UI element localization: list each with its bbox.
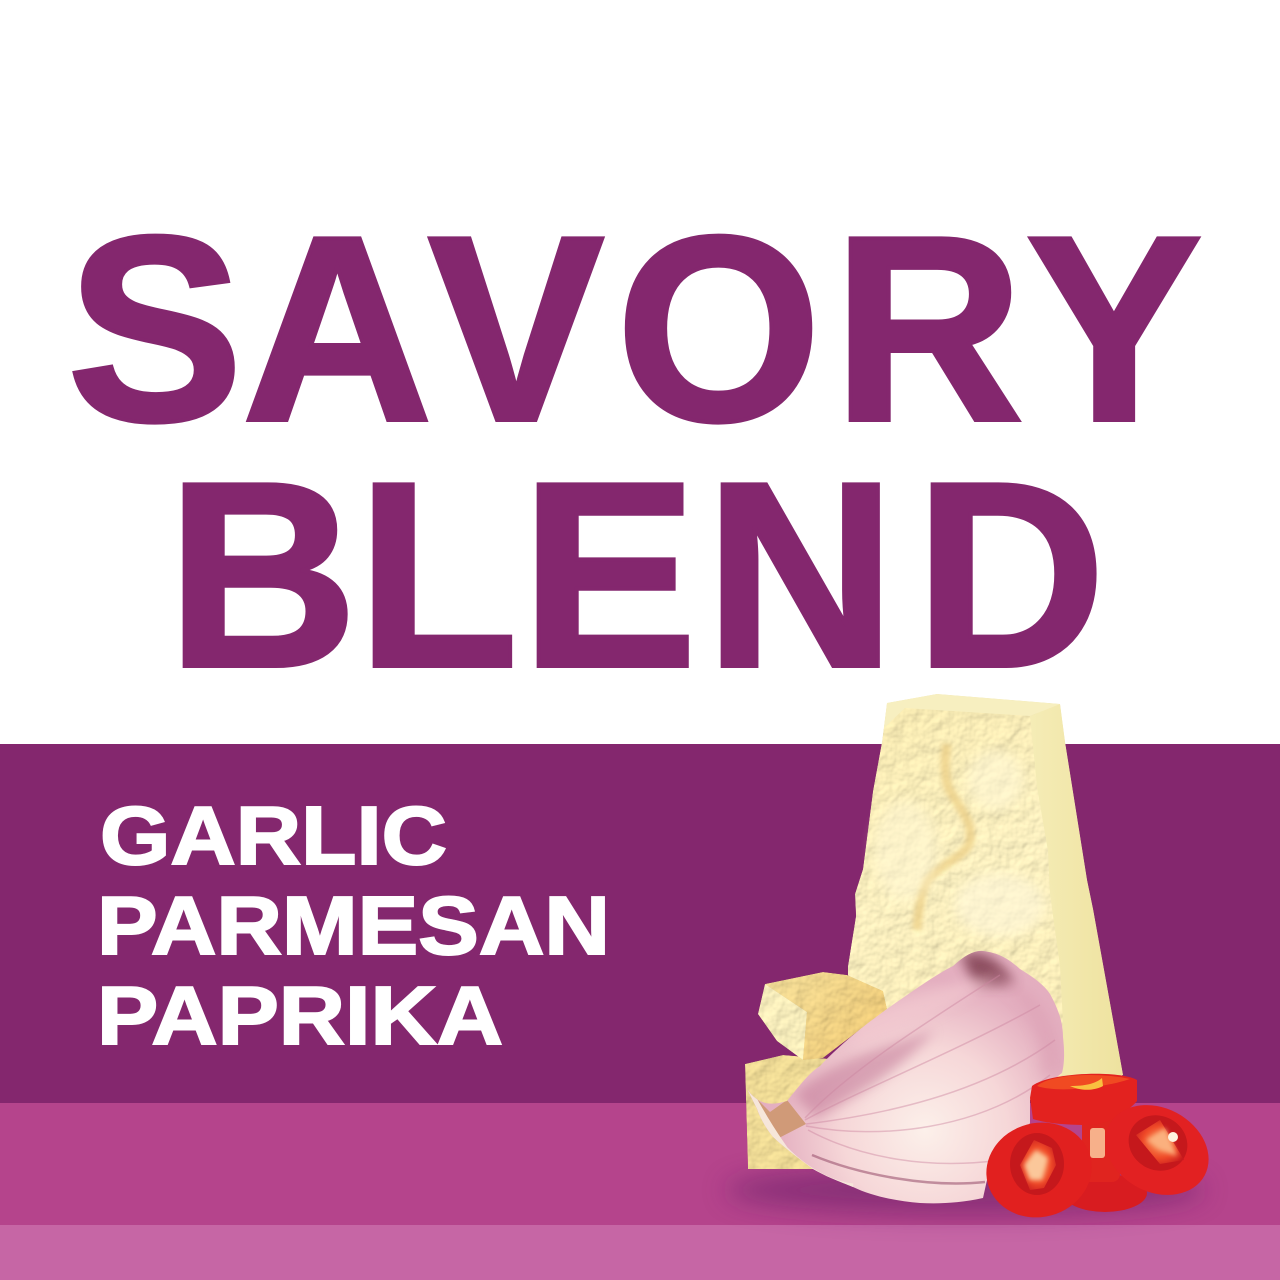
- title: SAVORY: [67, 181, 1202, 476]
- flavor list: [97, 789, 610, 1062]
- icon: chili slices: [976, 1074, 1224, 1229]
- band: dark purple: [0, 744, 1280, 1103]
- flavor list: GARLIC: [100, 789, 447, 882]
- background: white: [0, 0, 1280, 744]
- shadow under food: [725, 1166, 1205, 1214]
- chili slice back: [1030, 1074, 1137, 1125]
- band: magenta: [0, 1103, 1280, 1225]
- band: light pink: [0, 1225, 1280, 1280]
- flavor list: PAPRIKA: [97, 969, 503, 1062]
- icon: small cheese chunk lower: [745, 1055, 830, 1169]
- chili slice middle: [1082, 1116, 1120, 1182]
- chili slice left: [976, 1111, 1102, 1229]
- icon: parmesan wedge: [848, 694, 1123, 1110]
- flavor list: PARMESAN: [97, 879, 610, 972]
- icon: small cheese chunk upper: [758, 972, 887, 1060]
- title: [67, 181, 1202, 722]
- title: BLEND: [167, 427, 1106, 722]
- food illustration: cheese, garlic and chili: [725, 694, 1224, 1229]
- chili slice bottom: [1063, 1174, 1147, 1212]
- icon: garlic clove: [747, 951, 1064, 1203]
- chili slice right: [1090, 1088, 1224, 1212]
